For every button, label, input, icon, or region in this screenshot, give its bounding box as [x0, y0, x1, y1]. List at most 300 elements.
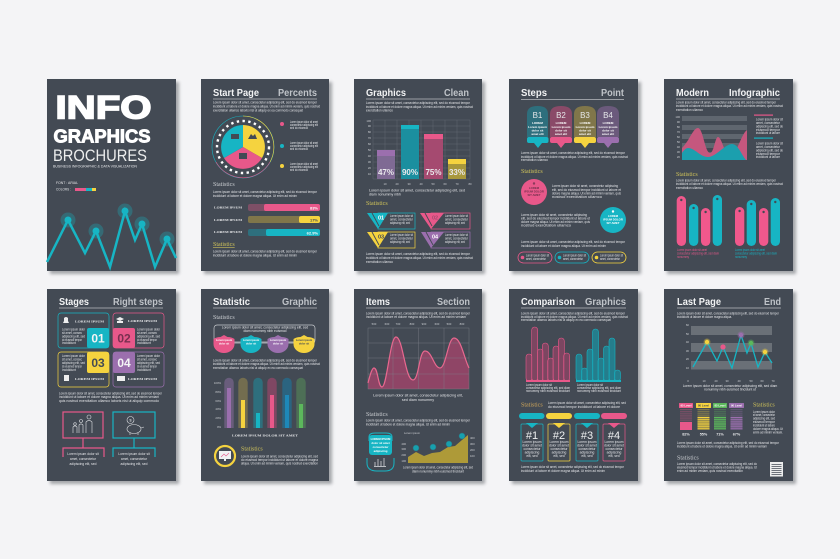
bar chart: 30 — [368, 160, 371, 164]
bar chart captions: nonummy nibh euismod tincidunt — [526, 389, 570, 393]
numbered triangle cards: 03 — [378, 234, 384, 240]
panel: comparison graphics — [509, 289, 641, 484]
numbered triangle cards: amet, consectetur — [390, 236, 414, 240]
progress bars: LOREM IPSUM — [214, 230, 243, 234]
mid text: incididunt ut labore et dolore magna aliqua. Ut enim ad minim veniam, quis nostrud — [213, 362, 320, 366]
bracket with four dome labels: Lorem ipsum dolor sit amet, consectetur adipiscing elit, sed — [222, 326, 308, 330]
intro text: incididunt ut labore et dolore magna aliqua. Ut enim ad minim veniam, quis nostrud — [521, 315, 628, 319]
bar chart: 50 — [431, 182, 435, 186]
heading: statistic: Statistic — [213, 297, 250, 308]
intro text — [366, 101, 473, 112]
icon: document — [770, 462, 783, 476]
four numbered stage cards: adipiscing elit, sed — [137, 361, 160, 365]
step badges B1 to B4: dolor sit — [602, 128, 614, 132]
statistics heading: Statistics — [366, 412, 388, 418]
panel: modern infographic — [664, 79, 796, 274]
mid text — [213, 358, 320, 370]
bracket with four dome labels: dolor sit — [246, 342, 256, 346]
statistics heading: Statistics — [213, 182, 235, 188]
side text: adipiscing elit, sed — [753, 416, 775, 420]
numbered triangle cards: Lorem ipsum dolor sit — [445, 214, 468, 218]
font and colours note: COLORS : — [56, 188, 71, 192]
pink and teal captions: consectetur adipiscing elit, sed diam — [677, 252, 719, 256]
outlined pills: amet, consectetur — [526, 257, 547, 261]
icon: monitor in yellow ring — [215, 446, 235, 466]
progress bars: 62.9% — [307, 230, 318, 235]
numbered triangle cards: amet, consectetur — [445, 236, 469, 240]
closing text: aliqua. Ut enim ad minim veniam, quis nostrud exercitation — [241, 462, 318, 466]
statistics heading, yellow: Statistics — [753, 402, 775, 408]
bar chart: 40 — [419, 182, 423, 186]
four numbered stage cards: incididunt — [62, 368, 76, 372]
teal comparison bars — [576, 329, 621, 382]
olive area chart: 100 — [401, 459, 406, 463]
four numbered stage cards: sit amet, consec — [137, 358, 157, 362]
closing text: enim ad minim veniam, quis nostrud exercitation — [677, 469, 743, 473]
pink comparison bars — [526, 327, 570, 382]
four numbered stage cards: adipiscing elit, sed — [137, 334, 160, 338]
pie legend — [280, 120, 318, 172]
chart legend text: adipiscing elit, sed do — [756, 148, 783, 152]
closing text — [241, 454, 318, 466]
outlined pills: amet, consectetur — [563, 257, 584, 261]
teal badge with chart icon — [367, 433, 394, 471]
panel: items section — [354, 289, 485, 484]
area chart: 90 — [677, 120, 680, 124]
bar chart: 47% — [378, 168, 394, 177]
line chart with markers: 40 — [737, 379, 741, 383]
statistics heading: Statistics — [213, 315, 235, 321]
teal circle callout: IPSUM DOLOR — [603, 218, 623, 222]
bracket with four dome labels: Lorem ipsum — [270, 338, 287, 342]
area chart: 80 — [677, 125, 680, 129]
area line chart: 800 — [410, 322, 415, 326]
four numbered stage cards: LOREM IPSUM — [75, 377, 105, 381]
pink circle callout: IPSUM DOLOR — [524, 190, 544, 194]
statistics text — [676, 178, 783, 190]
line chart with markers: 30 — [725, 379, 729, 383]
line chart with markers: 60 — [760, 379, 764, 383]
bracket with four dome labels: diam nonummy nibh euismod — [243, 329, 287, 333]
statistics text — [366, 418, 471, 426]
panel: start page — [201, 79, 332, 274]
pink and teal captions: consectetur adipiscing elit, sed diam — [735, 252, 777, 256]
bar chart: 33% — [449, 168, 465, 177]
numbered triangle cards — [367, 213, 470, 248]
area line chart: 500 — [372, 322, 377, 326]
panel: last page — [664, 289, 796, 484]
bar chart: 90% — [402, 168, 418, 177]
bar chart: 100 — [366, 119, 371, 123]
bar chart: 20 — [368, 166, 371, 170]
chart legend text: Lorem ipsum dolor sit — [756, 142, 783, 146]
text right of pink circle: nostrud exercitation ullamco — [552, 195, 602, 199]
side text: eiusmod tempor — [753, 420, 776, 424]
four numbered stage cards: sit amet, consec — [62, 331, 82, 335]
chart caption: diam nonummy nibh — [369, 192, 401, 196]
four numbered stage cards — [58, 313, 164, 387]
bar chart captions: nonummy nibh euismod tincidunt — [577, 389, 621, 393]
closing text — [521, 465, 625, 473]
four ranked cards: Lorem ipsum — [549, 440, 569, 444]
statistics text: Lorem ipsum dolor sit amet, consectetur adipiscing elit, sed do eiusmod tempor — [213, 190, 318, 194]
progress bars: 17% — [310, 217, 318, 222]
mid text: exercitation ullamco laboris nisi ut aliquip ex ea commodo consequat — [213, 366, 303, 370]
step badges B1 to B4: amet elit — [531, 132, 544, 136]
bar chart: 80 — [368, 130, 371, 134]
closing text: Lorem ipsum dolor sit amet, consectetur adipiscing elit, sed do — [677, 462, 757, 466]
line chart with markers: 70 — [771, 379, 775, 383]
text right of pink circle: Lorem ipsum dolor sit amet, consectetur adipiscing — [552, 184, 618, 188]
statistics text: incididunt ut labore et dolore magna aliqua. Ut enim ad minim — [366, 422, 450, 426]
four numbered stage cards: 01 — [91, 332, 105, 346]
heading: start page: Start Page — [213, 88, 259, 99]
step badges B1 to B4: Lorem ipsum — [552, 125, 571, 129]
statistics heading: Statistics — [677, 456, 699, 462]
cover line chart — [47, 204, 176, 267]
statistics text: Lorem ipsum dolor sit amet, consectetur adipiscing elit, sed — [548, 401, 626, 405]
striped mini bars: 82% — [682, 432, 690, 436]
four numbered stage cards: incididunt — [137, 368, 151, 372]
line chart with markers: 10 — [686, 366, 689, 370]
bar chart: 90 — [368, 124, 371, 128]
pink and teal captions — [677, 248, 777, 259]
pink frame caption: Lorem ipsum dolor sit — [67, 452, 99, 456]
olive area chart: 300 — [470, 442, 475, 446]
teal badge with chart icon: LOREM IPSUM — [371, 437, 391, 441]
chart legend text — [754, 114, 783, 159]
four ranked cards: adipiscing — [580, 450, 594, 454]
bar chart: 70 — [368, 136, 371, 140]
closing text: incididunt ut labore et dolore magna aliqua. Ut enim ad minim — [521, 469, 605, 473]
four ranked cards: adipiscing — [552, 450, 566, 454]
area line chart: 500 — [447, 322, 452, 326]
text right of pink circle — [552, 184, 621, 199]
four numbered stage cards: sit amet, consec — [62, 358, 82, 362]
step badges B1 to B4: amet elit — [602, 132, 614, 136]
pink circle callout — [521, 179, 547, 205]
area chart caption: diam nonummy nibh euismod tincidunt — [412, 470, 464, 474]
intro text: exercitation ullamco laboris nisi ut aliquip ex ea commodo consequat — [213, 108, 303, 112]
bar chart: 80 — [468, 182, 472, 186]
striped mini bars: 80 Level — [698, 404, 709, 408]
heading: right steps: Right steps — [113, 297, 163, 308]
area chart — [675, 115, 747, 160]
numbered triangle cards: adipiscing elit, sed — [390, 240, 410, 244]
chart caption: sed diam nonummy — [402, 398, 434, 402]
line chart with markers: 60 — [686, 323, 689, 327]
numbered triangle cards: Lorem ipsum dolor sit — [445, 233, 468, 237]
area line chart: 800 — [460, 322, 465, 326]
area chart: 20 — [677, 155, 680, 159]
chart caption — [373, 394, 463, 402]
striped mini bars: 85 Level — [714, 404, 726, 408]
teal badge with chart icon: dolor sit amet — [371, 441, 390, 445]
chart caption: Lorem ipsum dolor sit amet, consectetur adipiscing elit, sed — [369, 188, 465, 192]
closing text: Lorem ipsum dolor sit amet, consectetur adipiscing elit, sed do eiusmod tempor — [213, 250, 318, 254]
four ranked cards: adipiscing — [525, 450, 539, 454]
column chart: 20% — [215, 416, 222, 420]
statistics heading: Statistics — [676, 172, 698, 178]
four numbered stage cards: 02 — [117, 332, 131, 346]
mid text: quis nostrud exercitation ullamco laboris nisi ut aliquip commodo — [59, 399, 159, 403]
statistics heading: Statistics — [521, 402, 543, 408]
four numbered stage cards: 03 — [91, 356, 105, 370]
four numbered stage cards: do eiusmod tempor — [62, 338, 83, 342]
heading: graphics: Graphics — [366, 88, 406, 99]
area chart caption: Lorem ipsum dolor sit amet, consectetur adipiscing elit, sed — [403, 466, 473, 470]
intro text: incididunt ut labore et dolore magna aliqua. Ut enim ad minim veniam, quis nostrud — [676, 104, 783, 108]
area chart: 70 — [677, 130, 680, 134]
bar chart: 60 — [443, 182, 447, 186]
pie legend: sed do eiusmod — [290, 147, 308, 151]
progress bars: LOREM IPSUM — [214, 218, 243, 222]
cover subtitle: BUSINESS INFOGRAPHIC & DATA VISUALIZATION — [53, 164, 138, 168]
four numbered stage cards: incididunt — [137, 341, 151, 345]
bar chart: 10 — [383, 182, 387, 186]
bar chart captions — [526, 383, 621, 393]
striped mini bars: 55% — [700, 432, 708, 436]
side text: Lorem ipsum dolor — [753, 410, 776, 414]
bar chart — [366, 119, 472, 186]
numbered triangle cards: amet, consectetur — [445, 218, 469, 222]
closing text: exercitation ullamco — [366, 260, 393, 264]
four ranked cards: Lorem ipsum — [577, 440, 597, 444]
four numbered stage cards: do eiusmod tempor — [137, 338, 158, 342]
four ranked cards: consectetur — [578, 447, 596, 451]
olive area chart: 400 — [470, 436, 475, 440]
statistics text: do eiusmod tempor incididunt ut labore et dolore — [548, 405, 620, 409]
striped mini bars: 67% — [733, 432, 741, 436]
area chart caption — [403, 466, 473, 474]
column chart: 60% — [215, 399, 222, 403]
four ranked cards: dolor sit amet — [577, 444, 597, 448]
teal circle callout: SIT AMET — [607, 221, 620, 225]
pie legend: sed do eiusmod — [290, 126, 308, 130]
chart legend text: adipiscing elit, sed do — [756, 124, 783, 128]
striped mini bars: 71% — [716, 432, 724, 436]
pie legend: consectetur adipiscing elit — [290, 144, 318, 148]
column chart — [214, 378, 306, 429]
area chart: 50 — [677, 140, 680, 144]
cover title: GRAPHICS: GRAPHICS — [54, 126, 150, 146]
olive area chart: 100 — [470, 454, 475, 458]
intro text: exercitation ullamco — [366, 108, 393, 112]
heading: section: Section — [437, 297, 470, 308]
chart legend text: eiusmod tempor — [756, 152, 781, 156]
panel: graphics — [354, 79, 485, 274]
four numbered stage cards: 04 — [117, 356, 131, 370]
chart caption: Lorem ipsum dolor sit amet, consectetur adipiscing elit, — [373, 394, 463, 398]
closing text: Lorem ipsum dolor sit amet, consectetur adipiscing elit, sed — [241, 454, 318, 458]
intro text — [366, 312, 471, 319]
lower text: Lorem ipsum dolor sit amet, consectetur adipiscing elit, sed do eiusmod tempor — [521, 240, 626, 244]
text left of teal circle: Lorem ipsum dolor sit amet, consectetur adipiscing — [521, 213, 587, 217]
bar chart: 30 — [407, 182, 411, 186]
pink and teal captions: Lorem ipsum dolor sit amet — [677, 248, 707, 252]
closing text: Lorem ipsum dolor sit amet, consectetur adipiscing elit, sed do eiusmod tempor — [521, 465, 625, 469]
step badges B1 to B4: dolor sit — [579, 128, 591, 132]
four numbered stage cards: incididunt — [62, 341, 76, 345]
intro text: incididunt ut labore et dolore magna aliqua. — [677, 315, 732, 319]
intro text: incididunt ut labore et dolore magna aliqua. Ut enim ad minim veniam — [366, 315, 466, 319]
pink frame caption: adipiscing elit, sed — [70, 462, 97, 466]
column chart: 0% — [217, 425, 222, 429]
numbered triangle cards: Lorem ipsum dolor sit — [390, 214, 413, 218]
text left of teal circle: dolore magna aliqua. Ut enim ad minim veniam, quis — [521, 220, 590, 224]
four numbered stage cards: LOREM IPSUM — [75, 320, 105, 324]
heading: steps: Steps — [521, 88, 547, 99]
olive area chart: 200 — [401, 453, 406, 457]
closing text: do eiusmod tempor incididunt ut labore et dolore magna — [241, 458, 318, 462]
pink circle callout: LOREM — [529, 186, 540, 190]
olive area chart: 200 — [470, 448, 475, 452]
progress bars — [214, 204, 320, 236]
heading: items: Items — [366, 297, 390, 308]
line chart with markers: 40 — [686, 340, 689, 344]
step badges B1 to B4: B2 — [556, 111, 566, 120]
mid text: Lorem ipsum dolor sit amet, consectetur adipiscing elit, sed do eiusmod tempor — [677, 441, 780, 445]
closing text: incididunt ut labore et dolore magna aliqua. Ut enim ad minim — [213, 254, 297, 258]
line chart with markers — [686, 323, 775, 383]
four ranked cards: elit, sed — [581, 454, 593, 458]
area line chart: 600 — [385, 322, 390, 326]
numbered triangle cards: Lorem ipsum dolor sit — [390, 233, 413, 237]
outlined pills: Lorem ipsum dolor sit — [563, 254, 586, 258]
four ranked cards: dolor sit amet — [549, 444, 569, 448]
lower text: incididunt ut labore et dolore magna aliqua. Ut enim ad minim — [521, 244, 606, 248]
step badges B1 to B4: LOREM — [603, 121, 614, 125]
mid text — [59, 392, 163, 403]
statistics heading: Statistics — [366, 201, 388, 207]
teal badge with chart icon: adipiscing — [374, 449, 388, 453]
step badges B1 to B4: Lorem ipsum — [576, 125, 595, 129]
four numbered stage cards: Lorem ipsum dolor — [137, 354, 161, 358]
line chart with markers: 30 — [686, 349, 689, 353]
numbered triangle cards: 01 — [378, 216, 384, 222]
olive area chart: 300 — [401, 447, 406, 451]
four ranked cards: Lorem ipsum — [522, 440, 542, 444]
chart legend text: eiusmod tempor — [756, 128, 781, 132]
cover title: BROCHURES: BROCHURES — [53, 147, 147, 165]
statistics text — [213, 190, 318, 198]
heading: percents: Percents — [278, 88, 317, 99]
step badges B1 to B4: LOREM — [580, 121, 591, 125]
step badges B1 to B4: Lorem ipsum — [599, 125, 618, 129]
font and colours note — [56, 181, 96, 192]
panel: steps — [509, 79, 641, 274]
teal frame caption: Lorem ipsum dolor sit — [118, 452, 150, 456]
bar chart: 60 — [368, 142, 371, 146]
teal circle callout — [600, 207, 626, 233]
heading: infographic: Infographic — [729, 88, 780, 99]
numbered triangle cards: 04 — [432, 234, 439, 240]
intro text: Lorem ipsum dolor sit amet, consectetur adipiscing elit, sed do eiusmod tempor — [366, 312, 471, 316]
intro text — [677, 312, 780, 319]
mid text: Lorem ipsum dolor sit amet, consectetur adipiscing elit, sed do eiusmod tempor — [59, 392, 163, 396]
step badges B1 to B4 — [527, 106, 619, 148]
olive area chart: 400 — [401, 442, 406, 446]
pink and teal captions: nonummy — [735, 255, 747, 259]
intro text: Lorem ipsum dolor sit amet, consectetur adipiscing elit, sed do eiusmod tempor — [677, 312, 780, 316]
numbered triangle cards: 02 — [432, 216, 438, 222]
numbered triangle cards: adipiscing elit, sed — [445, 240, 465, 244]
text left of teal circle: elit, sed do eiusmod tempor incididunt ut labore et — [521, 216, 590, 220]
intro text: exercitation ullamco — [676, 108, 703, 112]
side text — [753, 410, 783, 434]
four ranked cards: #3 — [581, 430, 593, 442]
progress bars: LOREM IPSUM — [214, 206, 243, 210]
olive area chart — [401, 431, 475, 463]
intro text — [521, 312, 628, 322]
intro text: exercitation ullamco laboris nisi ut aliquip ex ea commodo consequat — [521, 318, 611, 322]
mid text: incididunt ut labore et dolore magna aliqua. Ut enim ad minim veniam — [59, 395, 159, 399]
heading: clean: Clean — [444, 88, 469, 99]
bracket with four dome labels — [214, 325, 315, 353]
pink frame caption: amet, consectetur — [70, 457, 97, 461]
outlined pills: Lorem ipsum dolor sit — [600, 254, 623, 258]
intro text — [213, 100, 320, 112]
pie chart with dotted ring — [212, 116, 274, 178]
side text: dolore magna aliqua. Ut — [753, 427, 783, 431]
intro text: incididunt ut labore et dolore magna aliqua. Ut enim ad minim veniam, quis nostrud — [213, 104, 320, 108]
bar chart captions: consectetur adipiscing elit, sed diam — [526, 386, 570, 390]
text below badges — [521, 151, 628, 162]
text right of pink circle: elit, sed do eiusmod tempor incididunt ut labore et — [552, 188, 621, 192]
intro text: Lorem ipsum dolor sit amet, consectetur adipiscing elit, sed do eiusmod tempor — [366, 101, 471, 105]
pie legend: Lorem ipsum dolor sit amet — [290, 141, 318, 145]
step badges B1 to B4: B3 — [580, 111, 590, 120]
statistics heading: Statistics — [521, 169, 543, 175]
pink frame with people icon — [63, 412, 104, 457]
column chart: 80% — [215, 390, 222, 394]
pink circle callout: SIT AMET — [528, 193, 541, 197]
heading: graphic: Graphic — [282, 297, 317, 308]
chart caption: Lorem ipsum dolor sit amet, consectetur adipiscing elit, sed diam — [683, 384, 778, 388]
closing text — [213, 250, 318, 258]
striped mini bars: 95 Level — [680, 404, 692, 408]
heading: comparison: Comparison — [521, 297, 575, 308]
text left of teal circle — [521, 213, 590, 228]
bar chart captions: Lorem ipsum dolor sit — [526, 383, 552, 387]
pie legend: sed do eiusmod — [290, 168, 308, 172]
four ranked cards: consectetur — [523, 447, 541, 451]
heading: modern: Modern — [676, 88, 709, 99]
four numbered stage cards: LOREM IPSUM — [128, 377, 158, 381]
chart caption: LOREM IPSUM DOLOR SIT AMET — [232, 434, 299, 438]
bar chart: 10 — [368, 172, 371, 176]
area line chart: 700 — [396, 322, 401, 326]
four ranked cards: dolor sit amet — [522, 444, 542, 448]
closing text — [677, 462, 757, 473]
pie legend: consectetur adipiscing elit — [290, 165, 318, 169]
four ranked cards — [519, 413, 627, 461]
line chart with markers: 50 — [749, 379, 753, 383]
statistics text: Lorem ipsum dolor sit amet, consectetur adipiscing elit, sed do eiusmod tempor — [676, 178, 777, 182]
chart legend text: amet, consectetur — [756, 145, 781, 149]
bracket with four dome labels: Lorem ipsum — [243, 338, 260, 342]
chart caption — [683, 384, 778, 392]
step badges B1 to B4: B1 — [533, 111, 543, 120]
pill bar chart — [677, 195, 780, 246]
heading: point: Point — [601, 88, 625, 99]
bar chart: 40 — [368, 154, 371, 158]
four ranked cards: #4 — [608, 430, 620, 442]
side text: incididunt ut labore — [753, 424, 775, 428]
text below badges: incididunt ut labore et dolore magna aliqua. Ut enim ad minim veniam, quis nostrud — [521, 155, 628, 159]
statistics text — [548, 401, 626, 409]
intro text — [676, 100, 783, 112]
